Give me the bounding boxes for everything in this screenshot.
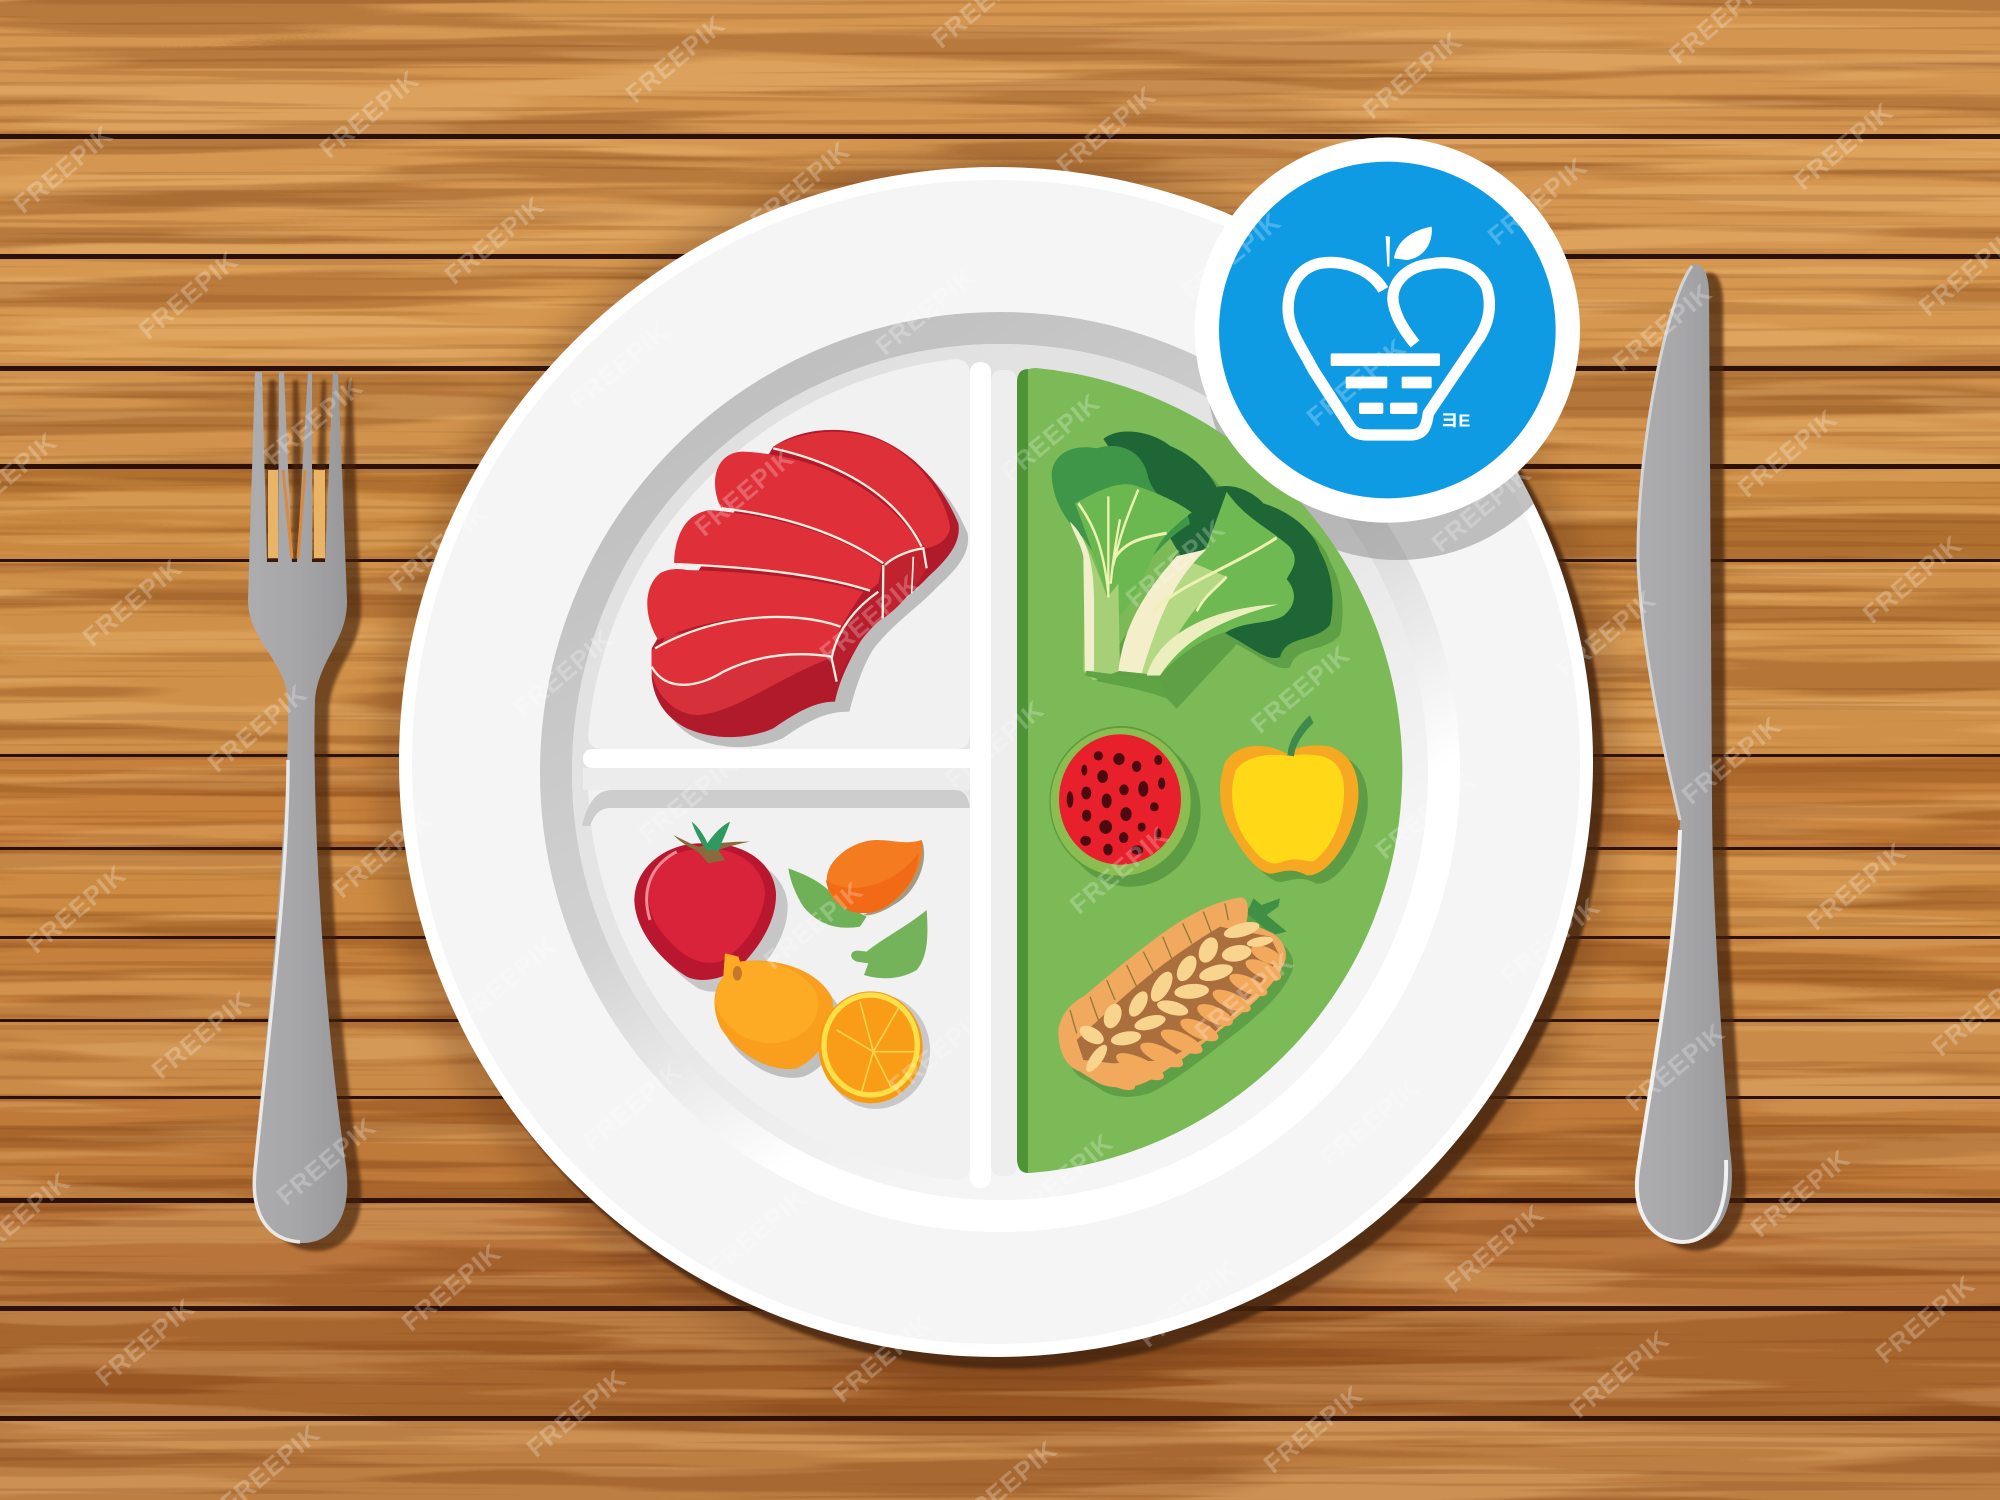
watermark: FREEPIK repeated: FREEPIK [1314, 1072, 1425, 1172]
basil leaf [851, 910, 927, 978]
watermark: FREEPIK repeated: FREEPIK [258, 371, 369, 471]
watermark: FREEPIK repeated: FREEPIK [1551, 584, 1662, 684]
watermark: FREEPIK repeated: FREEPIK [314, 64, 425, 164]
section: protein [588, 359, 970, 749]
section: fruit and vegetables [582, 790, 970, 1180]
plate [399, 167, 1593, 1357]
watermark: FREEPIK repeated: FREEPIK [396, 1237, 507, 1337]
watermark: FREEPIK repeated: FREEPIK [1801, 836, 1912, 936]
watermark: FREEPIK repeated: FREEPIK [1051, 80, 1162, 180]
watermark: FREEPIK repeated: FREEPIK [508, 623, 619, 723]
watermark: FREEPIK repeated: FREEPIK [995, 387, 1106, 487]
watermark: FREEPIK repeated: FREEPIK [939, 694, 1050, 794]
watermark: FREEPIK repeated: FREEPIK [814, 568, 925, 668]
watermark: FREEPIK repeated: FREEPIK [564, 316, 675, 416]
watermark: FREEPIK repeated: FREEPIK [1564, 1324, 1675, 1424]
watermark: FREEPIK repeated: FREEPIK [90, 1292, 201, 1392]
watermark: FREEPIK repeated: FREEPIK [620, 9, 731, 109]
watermark: FREEPIK repeated: FREEPIK [133, 245, 244, 345]
watermark: FREEPIK repeated: FREEPIK [1301, 332, 1412, 432]
orange slice [816, 987, 937, 1116]
watermark: FREEPIK repeated: FREEPIK [8, 119, 119, 219]
watermark: FREEPIK repeated: FREEPIK [745, 135, 856, 235]
watermark: FREEPIK repeated: FREEPIK [633, 749, 744, 849]
watermark: FREEPIK repeated: FREEPIK [870, 261, 981, 361]
watermark: FREEPIK repeated: FREEPIK [758, 875, 869, 975]
watermark: FREEPIK repeated: FREEPIK [202, 678, 313, 778]
watermark: FREEPIK repeated: FREEPIK [1133, 1253, 1244, 1353]
watermark: FREEPIK repeated: FREEPIK [577, 1056, 688, 1156]
watermark: FREEPIK repeated: FREEPIK [1357, 25, 1468, 125]
watermark: FREEPIK repeated: FREEPIK [1745, 1143, 1856, 1243]
icon: apple heart basket [1288, 227, 1489, 435]
watermark: FREEPIK repeated: FREEPIK [1008, 1127, 1119, 1227]
tomato [634, 822, 788, 992]
broccoli [1052, 432, 1343, 709]
orange whole [714, 953, 840, 1078]
watermark: FREEPIK repeated: FREEPIK [1189, 946, 1300, 1046]
watermark: FREEPIK repeated: FREEPIK [1245, 639, 1356, 739]
steak [647, 430, 968, 747]
watermark: FREEPIK repeated: FREEPIK [1064, 820, 1175, 920]
watermark: FREEPIK repeated: FREEPIK [1482, 151, 1593, 251]
watermark: FREEPIK repeated: FREEPIK [327, 804, 438, 904]
watermark: FREEPIK repeated: FREEPIK [702, 1182, 813, 1282]
fork [248, 372, 361, 1251]
watermark: FREEPIK repeated: FREEPIK [1426, 458, 1537, 558]
watermark: FREEPIK repeated: FREEPIK [452, 930, 563, 1030]
section: green vegetables and grains [1017, 368, 1402, 1173]
badge: healthy eating apple basket icon [1195, 137, 1580, 523]
watermark: FREEPIK repeated: FREEPIK [883, 1001, 994, 1101]
watermark: FREEPIK repeated: FREEPIK [271, 1111, 382, 1211]
watermark: FREEPIK repeated: FREEPIK [1370, 765, 1481, 865]
watermark: FREEPIK repeated: FREEPIK [827, 1308, 938, 1408]
watermark: FREEPIK repeated: FREEPIK [77, 552, 188, 652]
watermark: FREEPIK repeated: FREEPIK [383, 497, 494, 597]
watermark: FREEPIK repeated: FREEPIK [1857, 529, 1968, 629]
watermark: FREEPIK repeated: FREEPIK [1176, 206, 1287, 306]
plate shadow [375, 150, 1625, 1390]
leaf [788, 868, 867, 928]
watermark: FREEPIK repeated: FREEPIK [21, 859, 132, 959]
watermark: FREEPIK repeated: FREEPIK [1732, 403, 1843, 503]
orange carrot fruit [826, 840, 924, 915]
watermark: FREEPIK repeated: FREEPIK [1120, 513, 1231, 613]
watermark: FREEPIK repeated: FREEPIK [1258, 1379, 1369, 1479]
knife [1636, 264, 1746, 1251]
whole grain cob [1058, 897, 1293, 1097]
yellow apple [1220, 719, 1368, 884]
watermark: FREEPIK repeated: FREEPIK [1439, 1198, 1550, 1298]
badge shadow [1210, 404, 1534, 560]
watermelon slice [1050, 727, 1201, 887]
icon mark glyphs: ヨE [1440, 411, 1470, 431]
plate dividers [583, 362, 991, 1188]
watermark: FREEPIK repeated: FREEPIK [1676, 710, 1787, 810]
watermark: FREEPIK repeated: FREEPIK [689, 442, 800, 542]
watermark: FREEPIK repeated: FREEPIK [1620, 1017, 1731, 1117]
watermark: FREEPIK repeated: FREEPIK [146, 985, 257, 1085]
watermark: FREEPIK repeated: FREEPIK [439, 190, 550, 290]
watermark: FREEPIK repeated: FREEPIK [1870, 1269, 1981, 1369]
watermark: FREEPIK repeated: FREEPIK [1788, 96, 1899, 196]
watermark: FREEPIK repeated: FREEPIK [521, 1363, 632, 1463]
fruit group [634, 822, 937, 1116]
watermark: FREEPIK repeated: FREEPIK [1607, 277, 1718, 377]
watermark: FREEPIK repeated: FREEPIK [1495, 891, 1606, 991]
